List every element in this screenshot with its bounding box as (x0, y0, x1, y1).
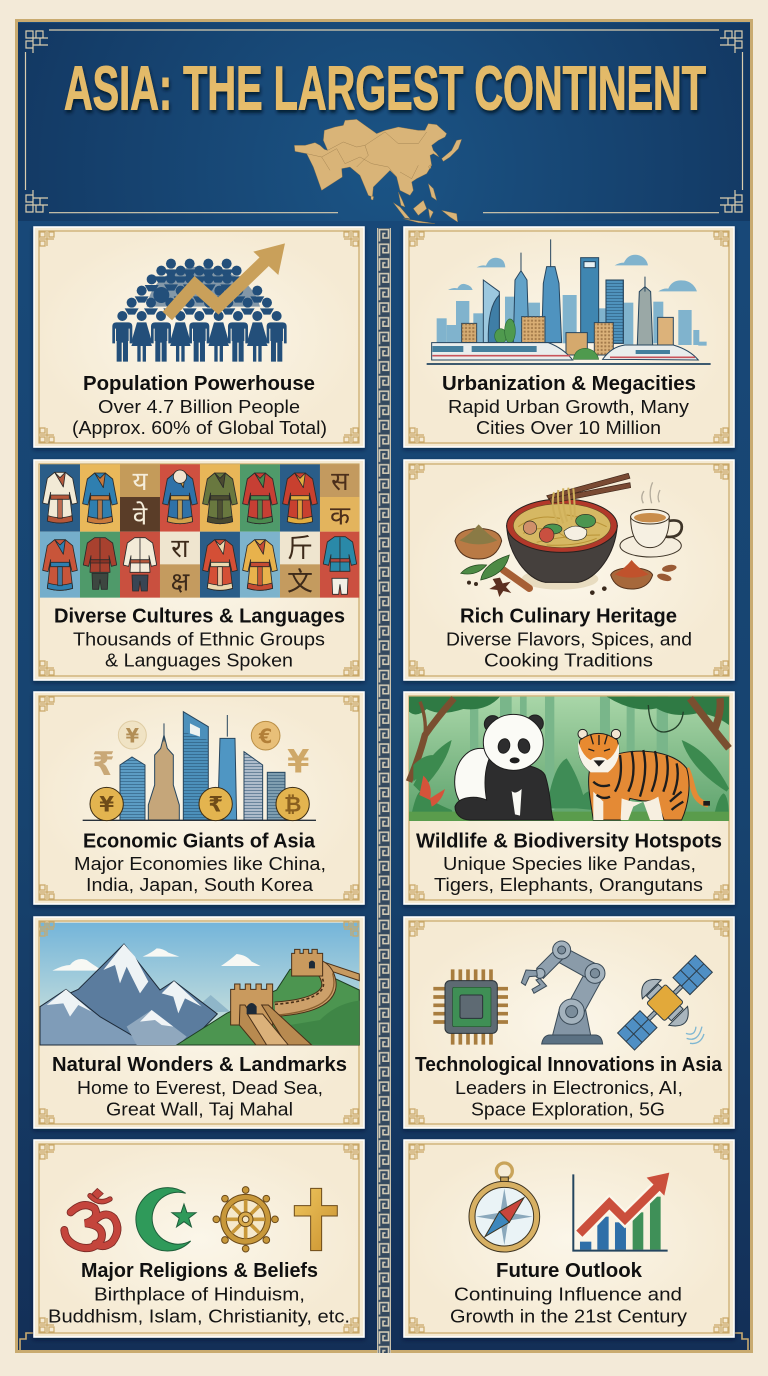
script characters: क (330, 500, 351, 530)
map of Asia (294, 119, 462, 224)
illustration: towers and currency coins: ¥ (99, 793, 114, 818)
text block: Space Exploration, 5G (471, 1099, 665, 1120)
illustration: towers and currency coins: ₹ (92, 745, 115, 783)
text block: Great Wall, Taj Mahal (106, 1099, 293, 1120)
illustration: towers and currency coins: € (258, 725, 272, 748)
card background (404, 227, 734, 447)
text block: Major Economies like China, (74, 853, 326, 874)
icon: om (64, 1188, 117, 1248)
text block: & Languages Spoken (105, 650, 293, 671)
icon: crowd with rising arrow (112, 243, 287, 362)
illustration: towers and currency coins: ₹ (208, 793, 223, 818)
card background (34, 227, 364, 447)
heading: Diverse Cultures & Languages (54, 606, 345, 628)
text block (448, 396, 690, 438)
card background (34, 692, 364, 904)
text block: Buddhism, Islam, Christianity, etc. (48, 1306, 350, 1327)
panel: natural wonders (34, 917, 364, 1128)
heading: Urbanization & Megacities (442, 373, 696, 395)
illustration: towers and currency coins: ¥ (287, 742, 309, 780)
text block: Birthplace of Hinduism, (94, 1284, 305, 1305)
text block: Leaders in Electronics, AI, (455, 1077, 683, 1098)
text block (446, 629, 692, 671)
text block (48, 1284, 350, 1327)
greek key centre column (377, 228, 391, 1353)
panel: future outlook (404, 1140, 734, 1337)
illustration: towers and currency coins: ₿ (284, 793, 301, 818)
script characters: स (331, 466, 349, 496)
icon: compass (469, 1163, 540, 1252)
icon: crescent and star (136, 1188, 196, 1251)
text block (77, 1077, 323, 1120)
illustration: towers and currency coins (83, 712, 316, 821)
text block: Cooking Traditions (484, 650, 653, 671)
text block (450, 1284, 688, 1327)
icon: dharma wheel (213, 1187, 278, 1252)
card background (34, 460, 364, 680)
icon: satellite (606, 944, 724, 1062)
heading: Technological Innovations in Asia (415, 1054, 723, 1076)
card corner ornaments (40, 922, 358, 936)
text block: Home to Everest, Dead Sea, (77, 1077, 323, 1098)
heading: Natural Wonders & Landmarks (52, 1054, 347, 1076)
text block: Unique Species like Pandas, (443, 853, 696, 874)
text block: India, Japan, South Korea (86, 874, 314, 895)
text block (74, 853, 326, 895)
heading: Population Powerhouse (83, 373, 315, 395)
header ornamental frame (26, 30, 742, 213)
text block: Growth in the 21st Century (450, 1306, 688, 1327)
card background (404, 1140, 734, 1337)
illustration: costume and script grid (40, 464, 359, 598)
card background (404, 692, 734, 904)
card background (404, 917, 734, 1128)
panel: population powerhouse (34, 227, 364, 447)
illustration: towers and currency coins: ¥ (126, 724, 140, 747)
text block: Over 4.7 Billion People (98, 396, 300, 417)
script characters: 斤 (287, 533, 313, 563)
icon: robotic arm (521, 941, 605, 1044)
card background (34, 917, 364, 1128)
text block (72, 396, 327, 438)
panel: diverse cultures (34, 460, 364, 680)
text block: Cities Over 10 Million (476, 417, 661, 438)
panel: economic giants (34, 692, 364, 904)
heading: Wildlife & Biodiversity Hotspots (416, 830, 722, 852)
panel: technology (404, 917, 734, 1128)
panel: religions (34, 1140, 364, 1337)
header band (18, 23, 750, 224)
heading: Major Religions & Beliefs (81, 1260, 318, 1282)
icon: cross (294, 1188, 337, 1251)
card background (404, 460, 734, 680)
text block (455, 1077, 683, 1120)
panel: culinary heritage (404, 460, 734, 680)
illustration: mountains and great wall (40, 923, 359, 1045)
script characters: वे (133, 500, 148, 530)
panel: wildlife (404, 692, 734, 904)
script characters: 文 (287, 566, 313, 596)
illustration: noodle bowl and spices (455, 473, 682, 597)
text block: Rapid Urban Growth, Many (448, 396, 690, 417)
illustration: panda and tiger in jungle (409, 697, 729, 821)
script characters: य (132, 466, 148, 496)
script characters: क्ष (171, 566, 190, 596)
text block: (Approx. 60% of Global Total) (72, 417, 327, 438)
text block: Tigers, Elephants, Orangutans (434, 874, 703, 895)
text block (434, 853, 703, 895)
text block (73, 629, 325, 671)
panel: urbanization (404, 227, 734, 447)
illustration: city skyline and trains (427, 239, 711, 364)
icon: microchip (433, 969, 508, 1045)
script characters: रा (171, 533, 190, 563)
heading: Future Outlook (496, 1260, 643, 1282)
text block: Continuing Influence and (454, 1284, 682, 1305)
chart: rising bars and arrow (573, 1173, 669, 1251)
heading: Rich Culinary Heritage (460, 606, 677, 628)
text block: Diverse Flavors, Spices, and (446, 629, 692, 650)
script characters (132, 466, 351, 596)
heading: Economic Giants of Asia (83, 830, 316, 852)
text block: Thousands of Ethnic Groups (73, 629, 325, 650)
card background (34, 1140, 364, 1337)
